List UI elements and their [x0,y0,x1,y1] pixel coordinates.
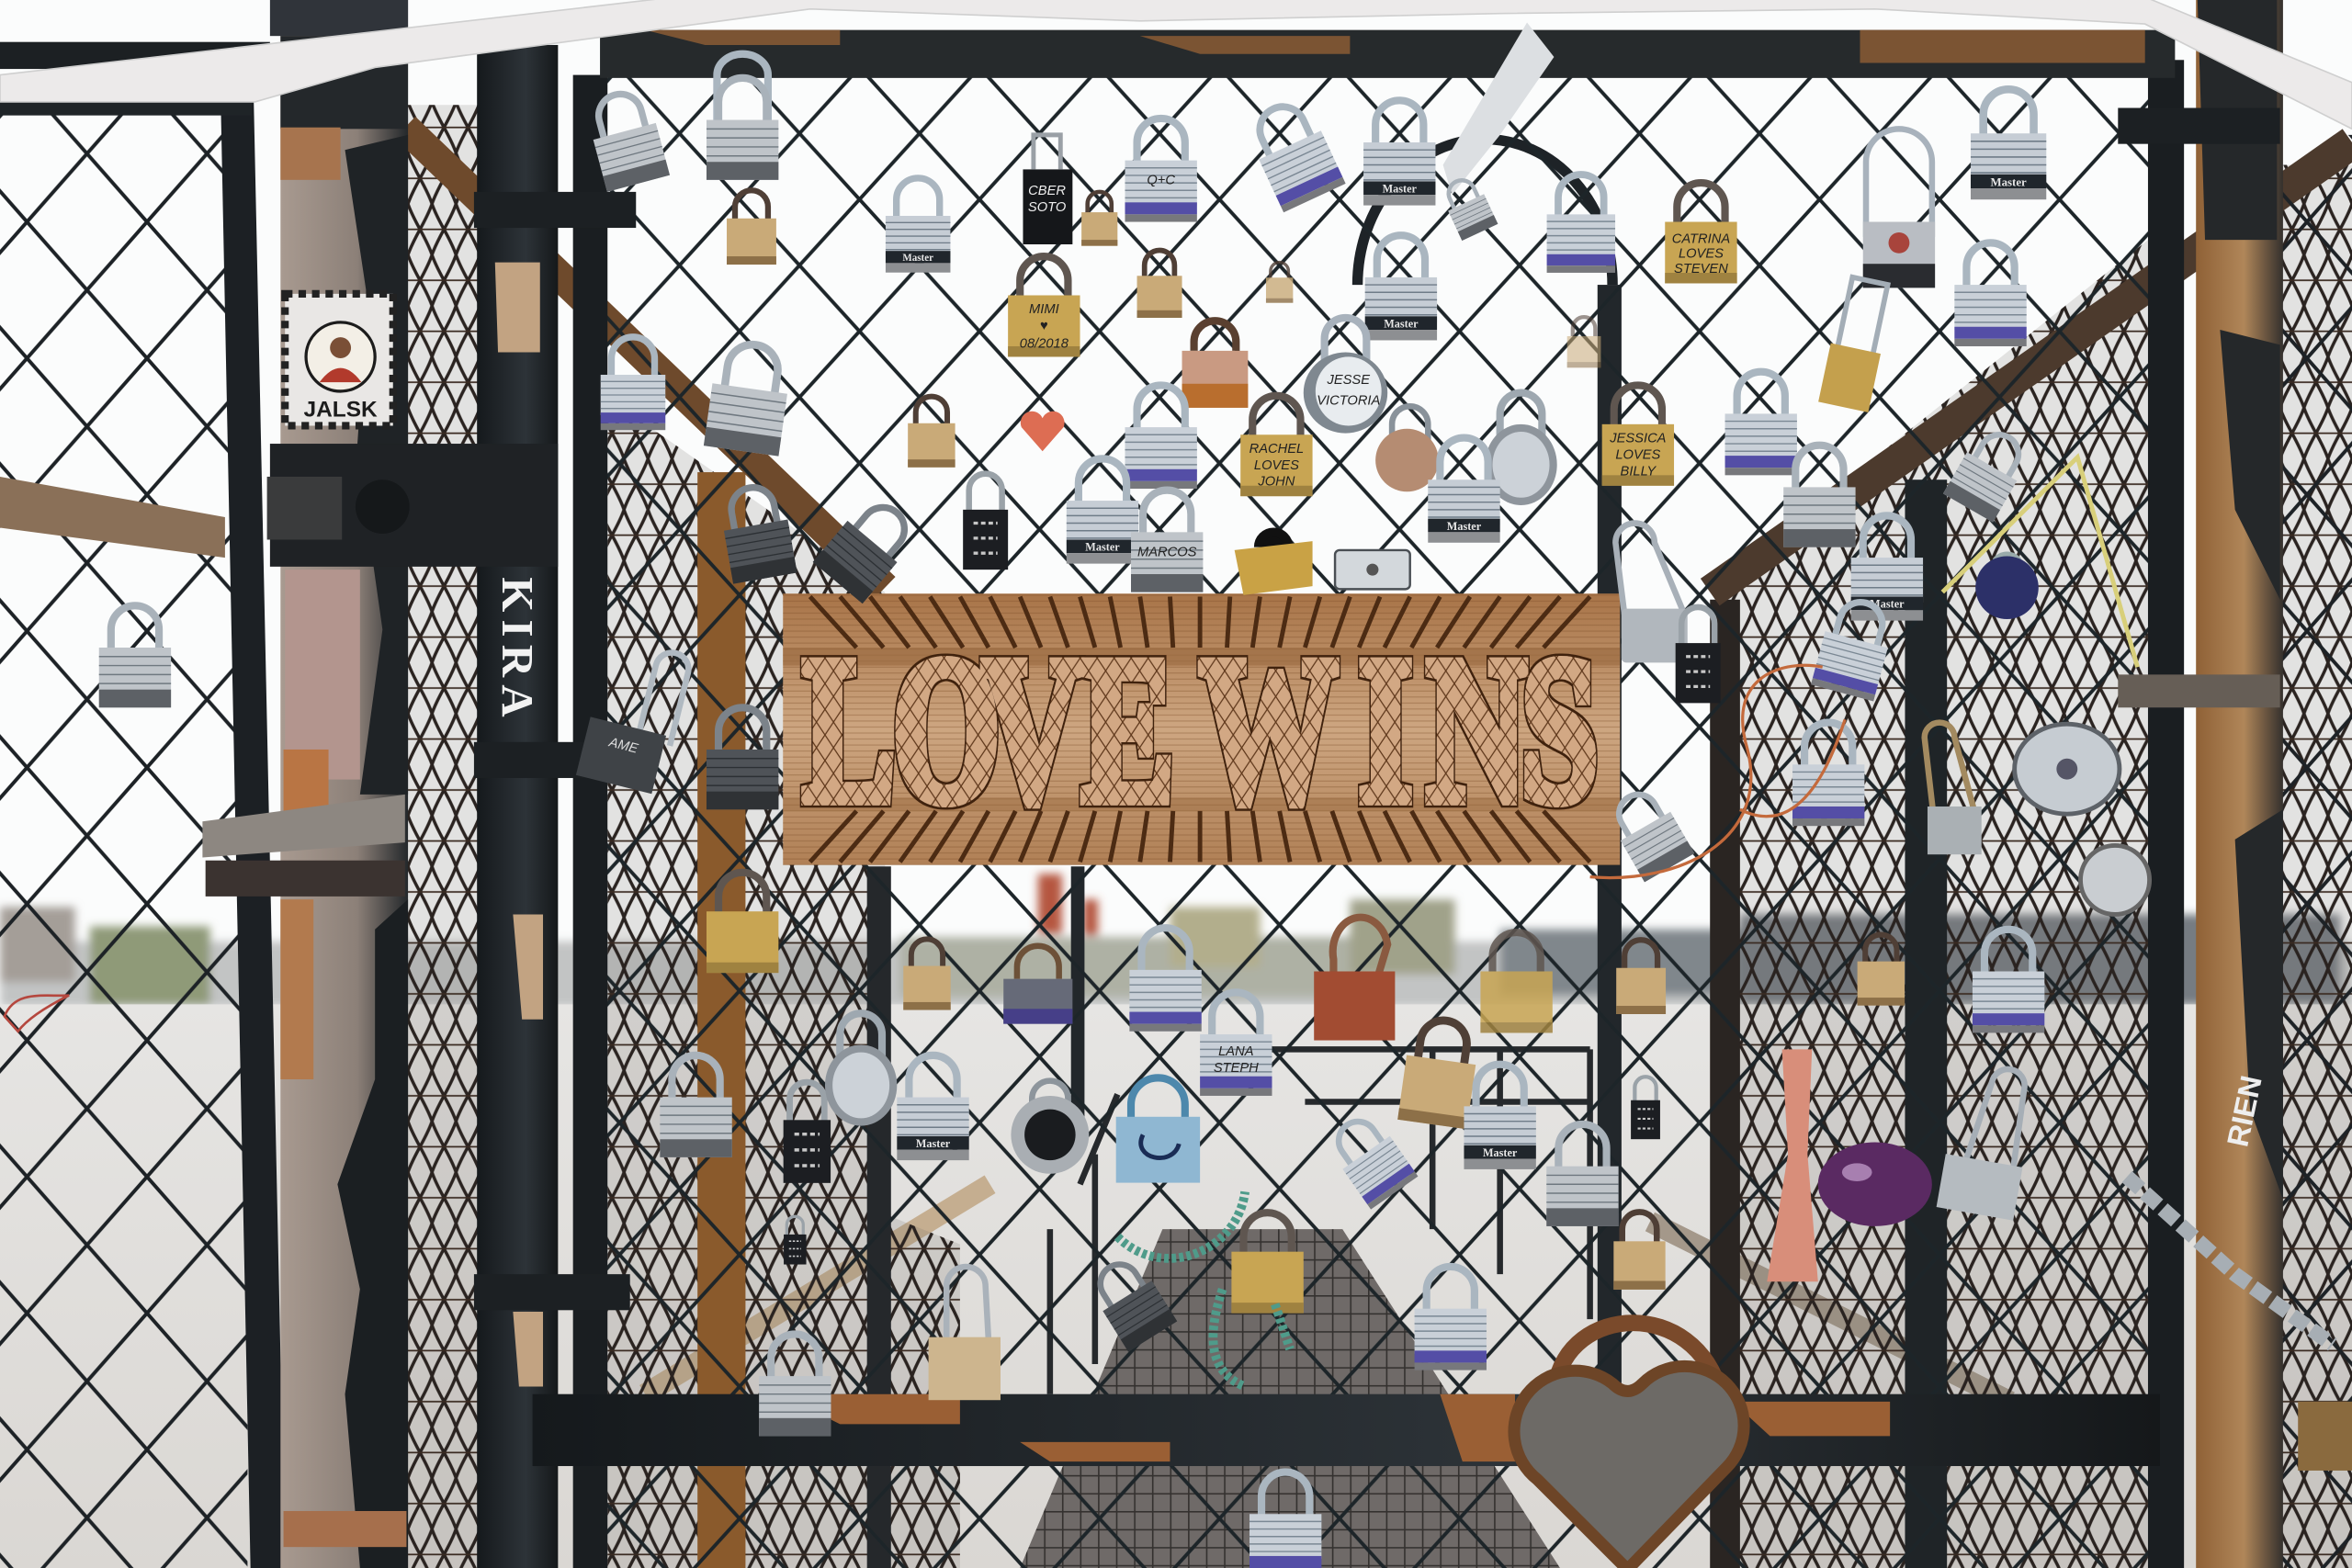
lock [1131,491,1203,592]
lock [1546,1124,1619,1226]
lock [1851,515,1923,621]
lock: Jesse and Victoria: JESSE [1326,373,1370,388]
lock [1397,1016,1481,1129]
lock: purple [1818,1143,1932,1226]
lock: tan long shackle [929,1267,1001,1400]
lock [1811,594,1897,701]
thin gate post [573,75,607,1568]
front chain-link mesh: left section [0,90,247,1568]
lock [1858,935,1905,1006]
lock [601,337,665,430]
lock: copper disc [1375,406,1439,491]
lock [1613,1212,1666,1290]
lock [963,474,1008,570]
lock [897,1055,969,1160]
lock [1567,317,1600,367]
lock [813,491,922,604]
weathered main post [270,0,408,1568]
small black lock [784,1216,807,1265]
sign lettering: LOVEWINS [803,616,1598,844]
lock: black combination: CBER [1028,184,1066,198]
lock [707,707,778,809]
sticker on post: JALSK [303,398,378,423]
lock: copper [1182,321,1248,408]
lock [1323,1109,1418,1210]
pier railings [645,1049,2010,1402]
lock [784,1082,831,1183]
hinge and clamps [202,192,636,1310]
lock: Mimi and Bryan: MIMI [1029,302,1059,317]
lock [1129,928,1202,1032]
lock: black combination: SOTO [1028,200,1067,215]
wooden stub [0,477,225,558]
thin left post [220,90,285,1568]
lock [1439,173,1498,241]
lock with long shackle, left: AME [606,735,639,757]
lock: round silver [1485,393,1557,505]
red ribbon lock [1767,1049,1818,1281]
front chain-link mesh: right section [2280,135,2352,1568]
rusty right post [2118,0,2283,1568]
rear side-fence mesh, left and right panels [405,105,2352,1568]
lock: Catrina and Steven [1665,183,1737,283]
lock [1365,235,1437,340]
lock: Mimi and Bryan: ♥ [1040,319,1048,333]
lock: Master [1428,438,1500,543]
black right gate post [2148,60,2184,1568]
lock: Rachel and John [1240,396,1313,496]
lock: long shackle [1937,1061,2039,1221]
lock: navy disc [1975,555,2039,619]
lock [1415,1267,1487,1371]
lock [1604,783,1694,882]
lock [1725,372,1797,475]
lock [1464,1065,1536,1169]
lock: Jessica and Billy: LOVES [1615,447,1661,462]
front chain-link mesh: center gate [600,72,2160,1568]
lock [1954,243,2027,346]
lock: black combination [1023,135,1072,244]
padlocks below the sign [5,457,2352,1568]
lock with long shackle, left [576,637,692,795]
lock: Jessica and Billy: BILLY [1621,464,1657,479]
lock tall shackle [1863,129,1935,288]
lock: brass with black shackle [1235,532,1313,595]
lock [1137,251,1182,318]
lock: long brass shackle [1925,723,1982,854]
lock: heart [1021,412,1065,451]
lock [1973,930,2044,1032]
lock: Q+C [1147,174,1175,188]
graffiti tag RIEN: RIEN [2220,1073,2268,1150]
lock [1231,1213,1304,1314]
lock [1363,100,1435,206]
lock [1125,118,1197,222]
orange cord [1590,665,1845,878]
lock [707,873,778,973]
lock: Mimi and Bryan: 08/2018 [1020,337,1069,352]
lock: brass with long shackle [1818,276,1895,412]
lock [1616,940,1666,1014]
lock: Catrina and Steven: STEVEN [1674,262,1728,276]
padlocks above the sign [99,54,2150,914]
lock [1631,1077,1660,1139]
lock [1547,175,1615,273]
lock: Rachel and John: RACHEL [1250,442,1304,457]
rust lock far right [2298,1402,2352,1471]
top rail [0,30,2175,116]
lock [1783,446,1856,547]
lock: red-brown [1314,918,1395,1041]
lock [660,1055,732,1157]
lock [718,482,797,584]
lock: round silver [825,1013,897,1126]
lock [707,54,778,180]
graffiti tag KIRA: KIRA [492,577,543,725]
background: far shore [0,874,2352,1008]
yellow cord [1942,457,2138,667]
black gate post [477,45,558,1568]
lock [1081,192,1117,246]
lock: combination dial [1011,1081,1089,1174]
lock [727,190,776,265]
torn tape strip [1443,22,1554,195]
lock bottom [1250,1472,1321,1568]
lock: round silver [2015,724,2120,814]
lock [1480,932,1553,1032]
lock [1085,1252,1177,1352]
lock far left [99,605,171,707]
lock [908,397,956,468]
pier walkway [1020,1229,1560,1568]
steel chain [2127,1177,2333,1345]
lock [886,178,950,273]
white tape banner along the top [0,0,2352,129]
lock [704,340,794,457]
lock: Jesse and Victoria: VICTORIA [1317,394,1380,409]
peeling paint on black post [495,263,543,1387]
wooden sign [783,593,1620,865]
lock [1242,95,1346,212]
lock [1615,524,1688,662]
lock: Mimi and Bryan [1008,256,1080,356]
lock: Jessica and Billy: JESSICA [1609,431,1666,446]
lock: Rachel and John: JOHN [1257,475,1295,490]
lock [583,86,670,192]
lock: MARCOS [1137,545,1197,559]
red wire on left fence [5,996,69,1032]
lock [1125,385,1197,489]
lock: Catrina and Steven: CATRINA [1672,231,1730,246]
lock: flat silver hasp [1335,550,1410,589]
lock [1266,263,1293,303]
lock: Lana and Steph [1200,992,1272,1096]
bottom rail [533,1394,2160,1466]
lock [903,939,951,1010]
sticker on post [285,294,393,425]
lock [1971,89,2046,199]
lock [1792,723,1864,826]
lock [1943,423,2034,523]
lock: Jesse and Victoria [1304,318,1387,434]
lock [1676,607,1721,703]
lock: Lana and Steph: LANA [1218,1044,1253,1059]
green bead necklace [1117,1191,1290,1387]
lock [1003,946,1072,1024]
lock: light blue [1116,1077,1200,1183]
large heart padlock [1514,1323,1744,1568]
lock: Catrina and Steven: LOVES [1679,247,1724,262]
lock [1067,458,1138,564]
lock: Lana and Steph: STEPH [1214,1061,1259,1076]
background: river [0,1004,2352,1568]
lock: Rachel and John: LOVES [1254,458,1299,473]
rear posts and rails [405,128,2352,1568]
lock [759,1334,831,1436]
lock: round silver [2080,845,2150,914]
lock: Jessica and Billy [1602,385,1674,486]
